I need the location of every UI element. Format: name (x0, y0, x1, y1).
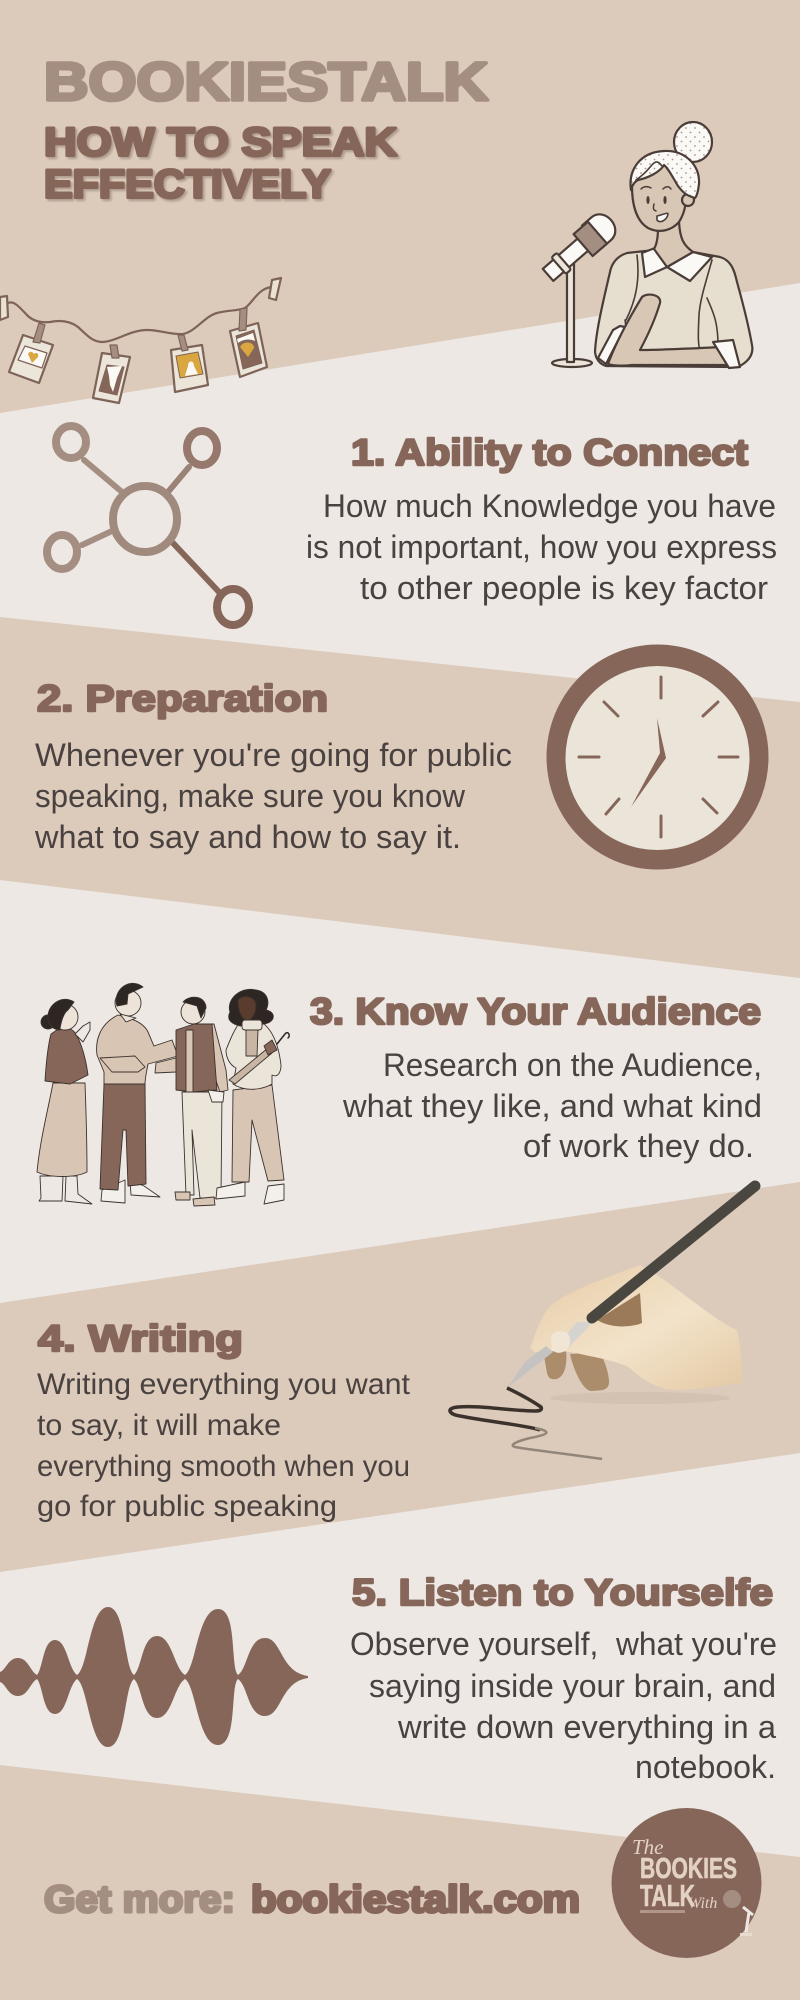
hair and bun (674, 122, 712, 162)
body text: notebook. (635, 1749, 776, 1785)
person: man in tan sweater (97, 983, 178, 1203)
body text: speaking, make sure you know (35, 778, 466, 814)
body text: to other people is key factor (360, 570, 768, 606)
section 4 (37, 1186, 755, 1523)
subtitle: HOW TO SPEAK (44, 120, 397, 164)
collar (642, 248, 712, 281)
title: BOOKIESTALK (44, 52, 488, 112)
icon: network hub (47, 426, 249, 625)
body text: of work they do. (523, 1128, 754, 1164)
arms (598, 326, 625, 364)
footer call to action: Get more: (44, 1879, 235, 1921)
person: woman in skirt (37, 999, 92, 1204)
body text (37, 1368, 411, 1523)
logo badge: The (632, 1835, 664, 1859)
heading: 4. Writing (38, 1318, 243, 1359)
heading: 5. Listen to Yourselfe (352, 1572, 773, 1613)
sweater (595, 250, 752, 367)
body text: Observe yourself, what you're (350, 1626, 777, 1662)
section 5 (0, 1572, 777, 1785)
body text: saying inside your brain, and (369, 1668, 776, 1704)
body text: is not important, how you express (306, 529, 777, 565)
icon: photo garland (0, 278, 281, 403)
footer call to action (44, 1879, 580, 1921)
heading: 1. Ability to Connect (351, 432, 748, 473)
footer call to action: bookiestalk.com (251, 1879, 580, 1921)
body text: what to say and how to say it. (34, 819, 461, 855)
logo badge: BOOKIES (640, 1853, 737, 1885)
body text: Writing everything you want (37, 1368, 411, 1401)
microphone stand (552, 262, 592, 367)
person: man in brown vest (155, 997, 228, 1206)
body text: Research on the Audience, (383, 1047, 762, 1083)
light band 3 (0, 1453, 800, 1857)
section 3 (37, 983, 762, 1206)
heading: 3. Know Your Audience (310, 991, 761, 1032)
icon: clock (546, 644, 768, 870)
person: woman with umbrella (216, 989, 289, 1204)
body text: How much Knowledge you have (323, 488, 776, 524)
subtitle (44, 120, 397, 206)
section 1 (47, 426, 777, 625)
body text (350, 1626, 777, 1785)
neck and face (654, 222, 693, 267)
body text (306, 488, 777, 606)
logo badge: TALK (640, 1878, 695, 1913)
subtitle: EFFECTIVELY (44, 162, 331, 206)
section 2 (34, 644, 769, 870)
body text: what they like, and what kind (342, 1088, 762, 1124)
body text: write down everything in a (397, 1709, 776, 1745)
light band 1 (0, 283, 800, 702)
logo badge (612, 1808, 762, 1958)
microphone (538, 209, 621, 286)
body text: Whenever you're going for public (35, 737, 512, 773)
body text: go for public speaking (37, 1490, 337, 1523)
icon: sound wave (0, 1607, 308, 1747)
icon: hand writing with pen (450, 1186, 755, 1459)
light band 2 (0, 880, 800, 1303)
body text (342, 1047, 762, 1164)
illustration: four people shaking hands (37, 983, 289, 1206)
logo badge: With (688, 1895, 717, 1912)
logo microphone (723, 1890, 753, 1936)
icon: woman speaking at microphone (538, 122, 752, 368)
body text: everything smooth when you (37, 1450, 410, 1483)
body text: to say, it will make (37, 1409, 281, 1442)
body text (34, 737, 512, 855)
facial features (641, 187, 671, 211)
heading: 2. Preparation (37, 678, 328, 719)
